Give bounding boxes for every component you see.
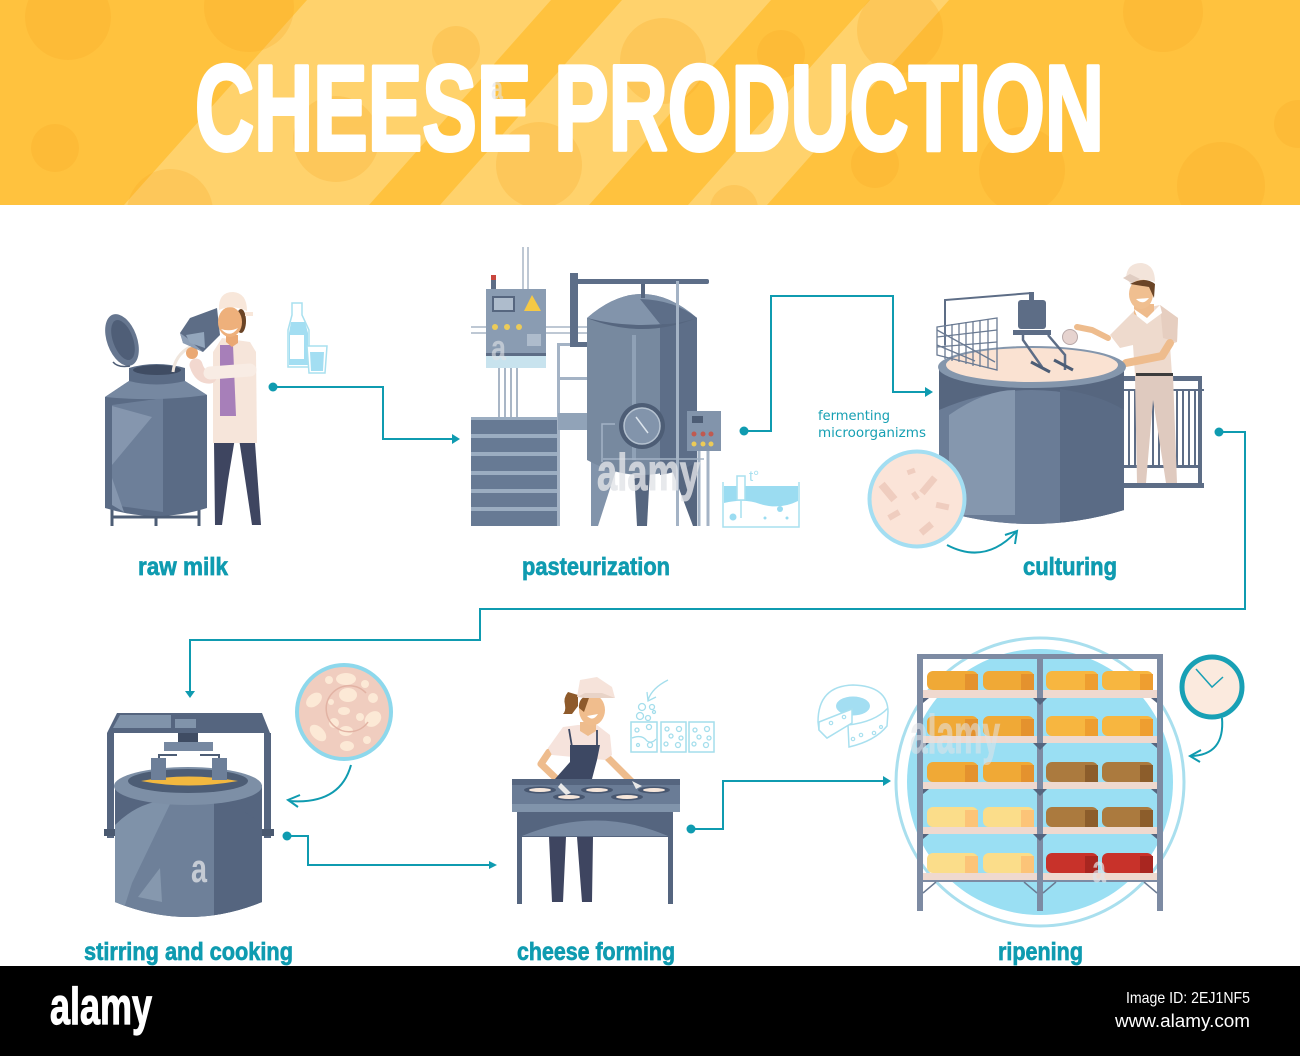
curved arrow to rack: [1190, 718, 1222, 762]
header banner: [0, 0, 1300, 205]
overhead pipe: [570, 273, 709, 526]
milk stream: [173, 347, 190, 372]
icon: milk bottle and glass: [288, 303, 327, 373]
icon: cheese wheel: [818, 685, 888, 747]
icon: clock: [1182, 657, 1242, 717]
footer image id: Image ID: 2EJ1NF5: [1126, 990, 1250, 1007]
stock watermarks: alamy: [597, 444, 700, 502]
balcony railing: [1124, 376, 1204, 488]
microscope circle: curds: [297, 665, 391, 759]
connector arrow 5: [686, 776, 891, 834]
figure: worker pouring milk: [180, 292, 261, 525]
footer logo: alamy: [50, 978, 152, 1036]
label: stirring and cooking: stirring and cooking: [84, 938, 293, 966]
icon: cheese moulds: [631, 680, 714, 752]
culturing vat: [938, 346, 1126, 530]
stock watermarks: a: [491, 327, 507, 368]
step 4: stirring and cooking illustration: [104, 665, 391, 935]
safety basket: [937, 318, 997, 370]
connector arrow 3: [185, 428, 1245, 698]
step 5: cheese forming illustration: [512, 677, 714, 904]
footer url: www.alamy.com: [1114, 1011, 1250, 1031]
cooking pot frame: [104, 713, 274, 838]
label: pasteurization: pasteurization: [522, 553, 670, 581]
agitator and motor: [945, 292, 1073, 372]
label: ripening: ripening: [998, 938, 1083, 966]
label: cheese forming: cheese forming: [517, 938, 675, 966]
footer bar: [0, 966, 1300, 1056]
icon: water bath with thermometer: [723, 468, 799, 527]
icon: water bath with thermometer: t°: [749, 468, 759, 485]
cooking pot: [114, 767, 262, 917]
cheese wheels: left column: [927, 671, 1034, 873]
label: raw milk: raw milk: [138, 553, 228, 581]
figure: worker forming cheese: [541, 677, 633, 902]
connector arrow 1: [268, 382, 460, 444]
stock watermarks: a: [1092, 849, 1107, 891]
icon: milk tank: [99, 309, 207, 526]
stock watermarks: a: [491, 70, 503, 106]
stock watermarks: alamy: [910, 703, 1000, 765]
step 3: culturing illustration: [818, 263, 1204, 553]
cheese wheels: right column: [1046, 671, 1153, 873]
heat exchanger stack: [471, 417, 558, 526]
stirring mechanism: [151, 733, 227, 780]
pipes and control panel: [471, 247, 587, 417]
step 2: pasteurization illustration: [471, 247, 799, 527]
cheese rack: [917, 654, 1163, 911]
stock watermarks: [191, 70, 1107, 891]
small control box: [687, 411, 721, 451]
backdrop circle: [896, 638, 1184, 926]
connector arrow 2: [740, 296, 933, 436]
text: fermenting microorganisms: fermenting: [818, 409, 890, 424]
connector arrow 4: [282, 832, 497, 869]
pasteurizer tank: [587, 294, 704, 526]
curved arrow to vat: [947, 531, 1017, 553]
label: culturing: culturing: [1023, 553, 1117, 581]
curved arrow to pot: [288, 765, 351, 807]
step 1: raw milk illustration: [99, 292, 327, 526]
figure: worker adding culture: [1062, 263, 1178, 483]
ladder and platform: [557, 343, 587, 526]
microscope circle: cultures: [870, 452, 964, 546]
step 6: ripening illustration: [818, 638, 1242, 926]
stock watermarks: a: [191, 847, 208, 891]
forming table: [512, 779, 680, 904]
text: fermenting microorganisms: microorganizms: [818, 426, 926, 441]
